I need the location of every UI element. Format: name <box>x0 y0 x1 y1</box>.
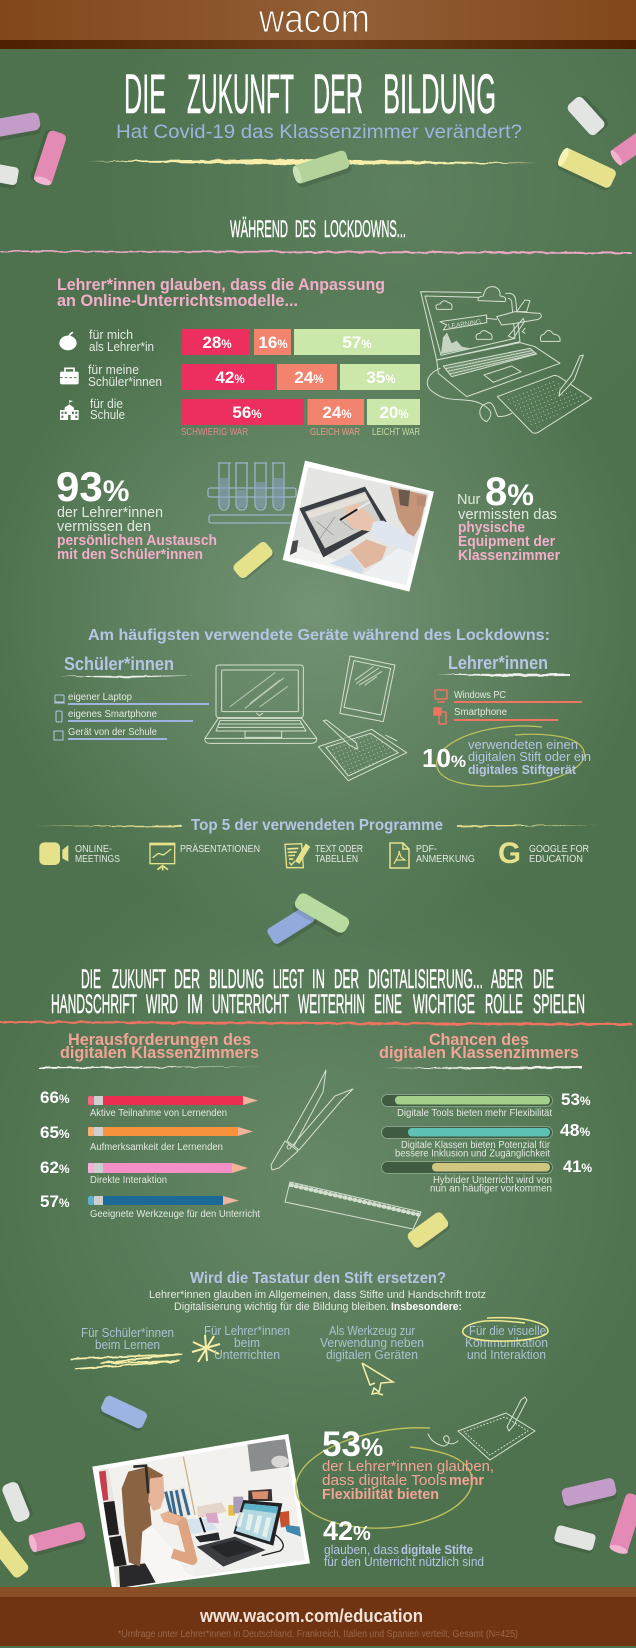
stacked bar chart: 24% <box>322 403 352 422</box>
column: alongside digital devices: digitalen Geräten <box>326 1347 418 1362</box>
chart legend: SCHWIERIG WAR <box>181 427 248 438</box>
illustration: laptop and pen tablet <box>421 287 592 433</box>
pencil row: 62 <box>40 1158 248 1186</box>
program: google <box>498 837 589 870</box>
callout: 10 percent with chalk circle: 10% <box>422 743 466 773</box>
heading: digitalen Klassenzimmers <box>60 1044 259 1062</box>
header bar with logo <box>0 0 636 49</box>
panel: top 5 programs <box>34 817 600 870</box>
stacked bar chart: 57% <box>342 333 372 352</box>
chalk: yellow lower left <box>0 1524 30 1580</box>
progress row: 53: 53% <box>561 1090 591 1109</box>
section heading: digitalisation: EINE <box>374 989 402 1019</box>
teachers list <box>434 689 582 724</box>
section heading: digitalisation: DIGITALISIERUNG... <box>368 964 483 994</box>
stat: 8 percent: vermissten das <box>458 507 557 523</box>
stacked bar chart: 16% <box>258 333 288 352</box>
section heading: digitalisation: IN <box>312 964 325 994</box>
icon: school <box>60 400 79 420</box>
heading: Herausforderungen des <box>68 1031 251 1049</box>
column: students learning: beim Lernen <box>95 1337 160 1352</box>
row label: teacher <box>89 328 154 354</box>
program: online meetings <box>39 842 120 865</box>
chalk: white lower left <box>1 1479 35 1524</box>
program: pdf annotation: ANMERKUNG <box>416 853 475 865</box>
yellow chalk underline <box>87 159 537 165</box>
column: teachers teaching: beim <box>234 1335 260 1350</box>
chalk star <box>192 1335 220 1362</box>
chalk: purple lower right <box>561 1477 618 1511</box>
chalk: pink left <box>29 128 67 187</box>
callout: 10 percent with chalk circle: digitales Stiftgerät <box>468 762 577 777</box>
pencil row: 65: 65% <box>40 1123 70 1142</box>
section heading: digitalisation: HANDSCHRIFT <box>51 989 137 1019</box>
intro text: Lehrer*innen glauben im Allgemeinen, dass Stifte und Handschrift trotz <box>149 1289 486 1301</box>
progress row: 53 <box>382 1090 591 1119</box>
row label: school: Schule <box>90 408 125 422</box>
section heading: digitalisation: DER <box>174 964 200 994</box>
stacked bar chart: 35% <box>366 368 396 387</box>
pink chalk divider <box>0 250 632 254</box>
stacked bar chart <box>182 329 420 425</box>
progress row: 41: Hybrider Unterricht wird von <box>433 1175 552 1186</box>
section heading: digitalisation: WEITERHIN <box>298 989 365 1019</box>
teachers list: Smartphone <box>454 706 507 718</box>
students list <box>54 691 209 740</box>
column: visual communication <box>465 1323 548 1362</box>
heading: Lehrer*innen glauben, dass die Anpassung <box>57 275 385 294</box>
section heading: digitalisation: ZUKUNFT <box>112 964 166 994</box>
section heading: digitalisation: WIRD <box>146 989 178 1019</box>
heading: Wird die Tastatur den Stift ersetzen? <box>190 1270 446 1287</box>
footer <box>0 1587 636 1646</box>
pencil row: 57: Geeignete Werkzeuge für den Unterricht <box>90 1209 260 1220</box>
column: teachers teaching <box>204 1323 290 1362</box>
section heading: digitalisation: ABER <box>491 964 523 994</box>
pencil row: 57: 57% <box>40 1192 70 1211</box>
stacked bar chart: 24% <box>294 368 324 387</box>
stat: 53 percent: Flexibilität bieten <box>322 1487 439 1503</box>
stat: 53 percent: 53% <box>322 1425 383 1464</box>
illustration: pen tablet small <box>428 1397 535 1460</box>
chalk: pink lower left <box>27 1521 87 1557</box>
panel: devices <box>54 627 591 786</box>
column: students learning: Für Schüler*innen <box>81 1325 174 1340</box>
progress row: 48: Digitale Klassen bieten Potenzial für <box>401 1140 551 1151</box>
text: LOCKDOWNS... <box>324 216 406 243</box>
pencil row: 57 <box>40 1192 260 1220</box>
column: teachers teaching: Unterrichten <box>214 1347 280 1362</box>
row label: teacher: für mich <box>89 328 133 342</box>
section heading: digitalisation: UNTERRICHT <box>212 989 289 1019</box>
icon: briefcase <box>60 368 79 384</box>
program: online meetings: MEETINGS <box>75 853 120 865</box>
chalk: yellow near ruler <box>406 1210 452 1252</box>
title: DER <box>313 62 363 125</box>
section heading: digitalisation: DIE <box>533 964 554 994</box>
chalk: white lower right <box>553 1525 597 1555</box>
chalk: white right <box>566 92 610 139</box>
pencil row: 62: 62% <box>40 1158 70 1177</box>
row label: students: Schüler*innen <box>88 375 162 389</box>
students heading: Schüler*innen <box>64 654 174 674</box>
chart legend <box>181 427 420 438</box>
chalk: green <box>291 149 353 189</box>
row label: school <box>90 397 125 422</box>
stat: 42 percent <box>323 1516 484 1569</box>
panel: opportunities <box>379 1031 592 1194</box>
intro text: Insbesondere: <box>391 1301 462 1313</box>
progress row: 53: Digitale Tools bieten mehr Flexibilität <box>397 1108 552 1119</box>
stat: 93 percent <box>56 463 217 563</box>
heading <box>60 1031 259 1062</box>
stacked bar chart: 20% <box>379 403 409 422</box>
column: teachers teaching: Für Lehrer*innen <box>204 1323 290 1338</box>
progress row: 48: 48% <box>560 1120 590 1140</box>
text: BILDUNG <box>383 62 496 125</box>
progress row: 48 <box>382 1120 590 1160</box>
chalk: yellow mid <box>231 540 276 582</box>
heading <box>379 1031 579 1062</box>
banner text: LEARNING <box>448 319 482 330</box>
section heading: digitalisation: BILDUNG <box>209 964 264 994</box>
column: alongside digital devices: Verwendung neben <box>320 1335 424 1350</box>
footer url: www.wacom.com/education <box>199 1606 423 1626</box>
title: ZUKUNFT <box>187 62 294 125</box>
students list: eigener Laptop <box>68 691 132 703</box>
stat: 53 percent: der Lehrer*innen glauben, <box>322 1459 494 1475</box>
stat: 93 percent: vermissen den <box>57 519 151 535</box>
chalk: pink lower right <box>608 1492 636 1556</box>
students list: eigenes Smartphone <box>68 708 157 720</box>
chalk: yellow right <box>555 146 618 192</box>
callout: 10 percent with chalk circle: digitalen Stift oder ein <box>468 749 591 764</box>
chalk: white left <box>0 162 19 190</box>
icon: apple <box>59 332 77 350</box>
stat: 8 percent <box>457 470 560 564</box>
title: DIE <box>124 62 166 125</box>
stat: 8 percent: physische <box>458 520 525 536</box>
students list: Gerät von der Schule <box>68 726 157 738</box>
heading: digitalen Klassenzimmers <box>379 1044 579 1062</box>
chalk scribble <box>70 1354 182 1369</box>
section heading: digitalisation: WICHTIGE <box>413 989 475 1019</box>
stat: 93 percent: 93% <box>56 463 129 510</box>
pencil row: 62: Direkte Interaktion <box>90 1175 167 1186</box>
program: pdf annotation <box>390 843 475 868</box>
illustration: ruler <box>285 1182 421 1229</box>
program: online meetings: ONLINE- <box>75 843 112 855</box>
heading: Top 5 der verwendeten Programme <box>191 817 443 834</box>
chalk: blue lower <box>98 1394 149 1433</box>
stat: 8 percent: Klassenzimmer <box>458 548 560 564</box>
illustration: test tubes <box>208 463 296 523</box>
program: pdf annotation: PDF- <box>416 843 437 855</box>
stat: 42 percent: glauben, dass <box>324 1542 399 1557</box>
stat: 42 percent: digitale Stifte <box>401 1542 473 1557</box>
row label: students: für meine <box>88 363 139 377</box>
intro text: Digitalisierung wichtig für die Bildung bleiben. <box>174 1301 389 1313</box>
program: text or tables: TEXT ODER <box>315 843 363 855</box>
program: google: GOOGLE FOR <box>529 843 589 855</box>
stacked bar chart: 42% <box>215 368 245 387</box>
section heading: lockdown: DES <box>295 216 316 243</box>
teachers heading: Lehrer*innen <box>448 653 548 673</box>
program: presentations <box>149 843 260 870</box>
photo: teacher using pen display <box>280 460 437 593</box>
stacked bar chart: 56% <box>232 403 262 422</box>
chart legend: GLEICH WAR <box>310 427 360 438</box>
footnote: *Umfrage unter Lehrer*innen in Deutschland, Frankreich, Italien und Spanien verteilt, Gesamt (N=425) <box>118 1629 518 1640</box>
heading: Chancen des <box>429 1031 529 1049</box>
progress row: 48: bessere Inklusion und Zugänglichkeit <box>395 1148 550 1160</box>
row label: teacher: als Lehrer*in <box>89 340 154 354</box>
pencil row: 65 <box>40 1123 253 1153</box>
section heading: digitalisation: DER <box>334 964 359 994</box>
panel: challenges <box>39 1031 262 1220</box>
pencil row: 65: Aufmerksamkeit der Lernenden <box>90 1142 223 1153</box>
pencil row: 66: 66% <box>40 1088 70 1107</box>
stacked bar chart: 28% <box>202 333 232 352</box>
progress row: 41: 41% <box>563 1158 592 1176</box>
heading <box>57 275 385 310</box>
illustration: compass <box>271 1070 353 1170</box>
stat: 53 percent <box>322 1425 494 1503</box>
program: google: EDUCATION <box>529 853 583 865</box>
stat: 93 percent: persönlichen Austausch <box>57 533 217 549</box>
stat: 53 percent: dass digitale Tools <box>322 1473 447 1489</box>
stat: 93 percent: mit den Schüler*innen <box>57 547 203 563</box>
program: presentations: PRÄSENTATIONEN <box>180 843 260 855</box>
progress row: 41 <box>382 1158 592 1194</box>
section heading: digitalisation: IM <box>187 989 203 1019</box>
section heading: lockdown: WÄHREND <box>230 216 288 243</box>
column: visual communication: und Interaktion <box>467 1347 546 1362</box>
stat: 8 percent: Nur <box>457 492 481 508</box>
stat: 53 percent: mehr <box>449 1473 484 1489</box>
pencil row: 66: Aktive Teilnahme von Lernenden <box>90 1108 227 1119</box>
stat: 93 percent: der Lehrer*innen <box>57 505 163 521</box>
subtitle: Hat Covid-19 das Klassenzimmer verändert? <box>116 121 522 143</box>
panel: keyboard vs pen <box>70 1270 548 1395</box>
heading: Am häufigsten verwendete Geräte während des Lockdowns: <box>88 627 550 644</box>
column: visual communication: Für die visuelle <box>469 1323 546 1338</box>
row label: students <box>88 363 162 389</box>
stat: 42 percent: für den Unterricht nützlich sind <box>324 1554 484 1569</box>
stat: 8 percent: Equipment der <box>458 534 555 550</box>
program: google: G <box>498 837 521 870</box>
photo: student at laptop <box>92 1433 312 1590</box>
program: text or tables <box>285 843 363 868</box>
chalk: pink right <box>609 123 636 167</box>
heading: an Online-Unterrichtsmodelle... <box>57 291 298 310</box>
section heading: digitalisation: LIEGT <box>273 964 304 994</box>
section heading: digitalisation <box>51 964 585 1019</box>
chalk: purple left <box>0 112 42 143</box>
red chalk divider <box>0 1021 632 1026</box>
column: visual communication: Kommunikation <box>465 1335 548 1350</box>
pencil row: 66 <box>40 1088 258 1119</box>
callout: 10 percent with chalk circle <box>422 726 591 786</box>
intro text <box>149 1289 486 1313</box>
stat: 42 percent: 42% <box>323 1516 371 1546</box>
section heading: digitalisation: DIE <box>81 964 101 994</box>
section heading: digitalisation: ROLLE <box>485 989 523 1019</box>
teachers list: Windows PC <box>454 689 506 701</box>
panel: adaptation survey <box>57 275 420 438</box>
row label: school: für die <box>90 397 123 411</box>
column: students learning <box>81 1325 174 1352</box>
program: text or tables: TABELLEN <box>315 853 358 865</box>
callout: 10 percent with chalk circle: verwendeten einen <box>468 737 578 752</box>
chalk oval around stat <box>296 1428 472 1528</box>
chalk: blue and green pair <box>266 891 351 949</box>
stat: 8 percent: 8% <box>485 470 534 514</box>
column: alongside digital devices <box>320 1323 424 1362</box>
chart legend: LEICHT WAR <box>372 427 420 438</box>
column: alongside digital devices: Als Werkzeug zur <box>329 1323 416 1338</box>
chalk cursor arrow <box>362 1363 393 1395</box>
illustration: devices <box>205 656 407 781</box>
progress row: 41: nun an häufiger vorkommen <box>430 1184 552 1194</box>
chalk oval <box>463 1318 548 1341</box>
